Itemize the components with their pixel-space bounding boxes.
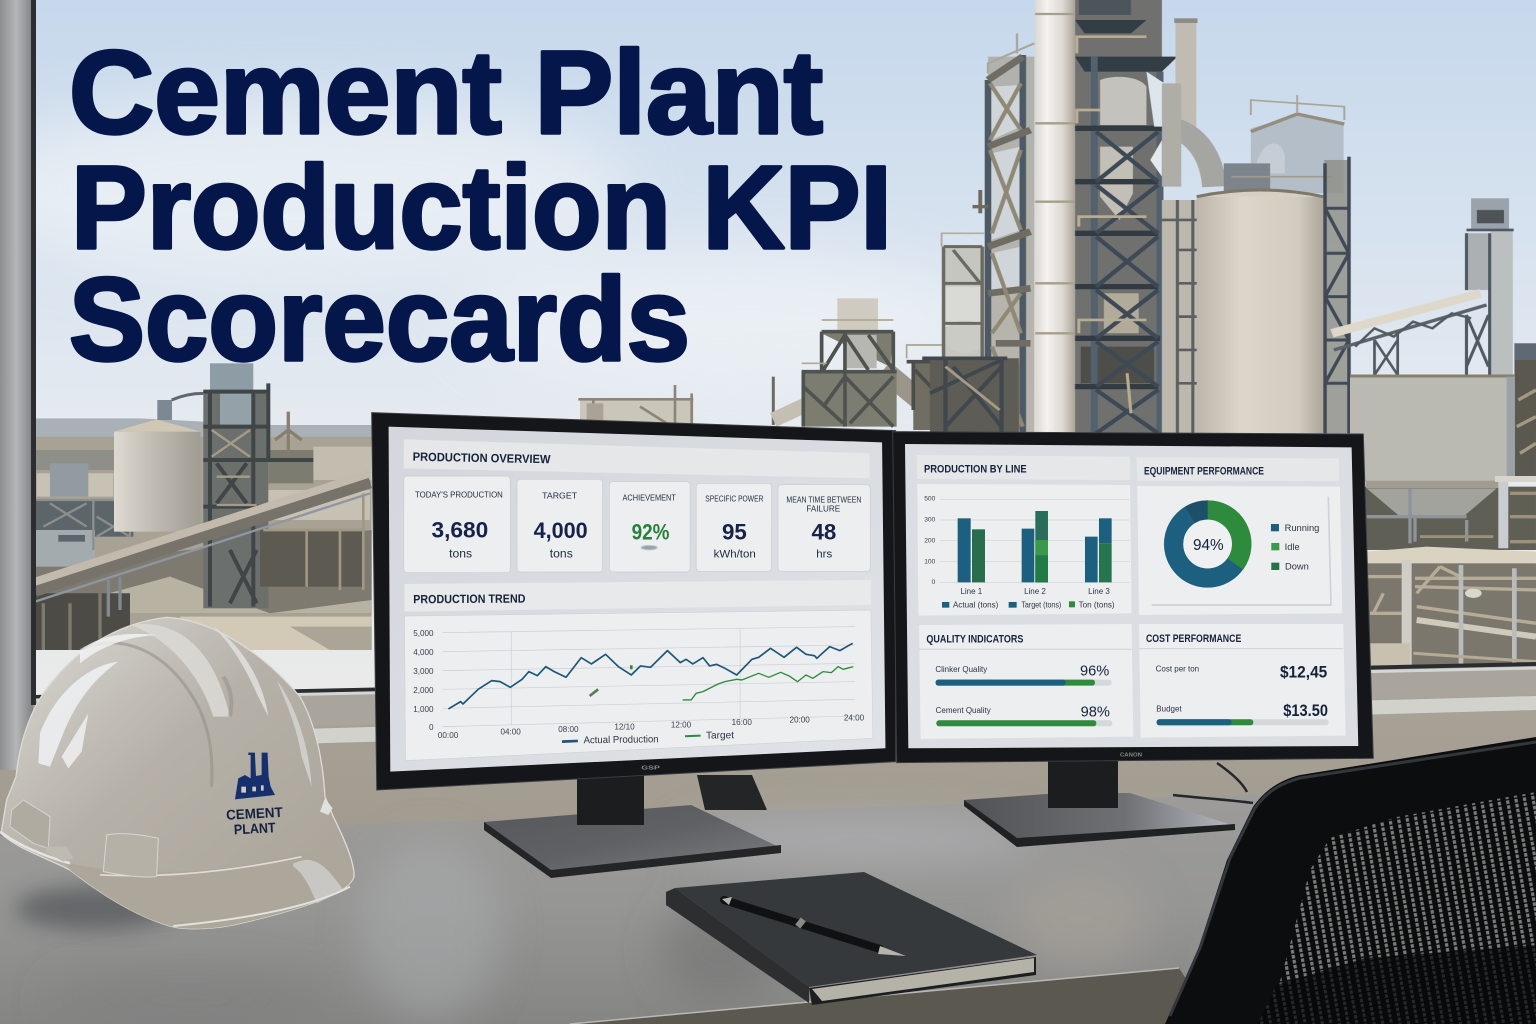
KPI card: achievement — [609, 482, 690, 572]
KPI card: target — [517, 479, 603, 572]
KPI card: mean time between failure: 48 — [812, 519, 836, 544]
clouds — [0, 100, 980, 390]
large silo — [1197, 190, 1323, 433]
far silo — [114, 393, 203, 532]
far conveyor — [35, 473, 370, 617]
factory icon — [235, 753, 275, 799]
bezel — [372, 413, 896, 790]
window sill — [35, 664, 1536, 697]
actual production line — [448, 643, 853, 709]
KPI card: today's production: 3,680 — [432, 517, 488, 542]
legend: Target — [706, 730, 734, 742]
hat shadow — [15, 886, 175, 930]
metric: budget — [1156, 701, 1329, 725]
panel: cost performance: COST PERFORMANCE — [1146, 633, 1241, 645]
left monitor stand — [484, 775, 781, 878]
office chair — [1165, 737, 1536, 1024]
second deck — [907, 345, 1020, 430]
bar chart: production by line: 200 — [924, 538, 936, 545]
category labels: Line 3 — [1088, 587, 1110, 596]
x axis labels: 20:00 — [789, 716, 810, 725]
hopper and frame — [1360, 476, 1536, 550]
KPI card: target: TARGET — [542, 491, 578, 501]
brand mark: CANON — [1120, 753, 1142, 759]
panel: quality indicators — [919, 624, 1133, 739]
window frame left — [0, 0, 33, 770]
metric: budget: Budget — [1156, 705, 1182, 714]
legend: Actual Production — [584, 734, 659, 746]
y axis labels: 0 — [429, 723, 434, 732]
metric: cement quality: 98% — [1081, 705, 1110, 721]
title: Cement Plant — [69, 27, 823, 159]
lower-left base — [922, 358, 1019, 433]
distant plant centre — [578, 298, 1020, 430]
far right tower — [1465, 198, 1514, 380]
x axis labels: 00:00 — [438, 731, 459, 740]
metric: cost per ton: $12,45 — [1280, 662, 1327, 681]
far building — [578, 385, 693, 423]
y axis labels: 1,000 — [413, 705, 434, 714]
KPI card: today's production: tons — [449, 546, 472, 560]
metric: clinker quality: Clinker Quality — [935, 665, 987, 674]
desk — [0, 785, 1536, 1024]
top house — [1224, 95, 1344, 193]
KPI card: achievement: ACHIEVEMENT — [622, 492, 676, 502]
legend: Target (tons) — [1021, 601, 1062, 610]
metric: cost per ton: Cost per ton — [1156, 664, 1199, 673]
category labels: Line 1 — [960, 587, 983, 596]
left tower — [973, 33, 1034, 433]
right monitor — [893, 432, 1373, 763]
header: production overview — [404, 439, 870, 478]
brand mark: GSP — [641, 765, 660, 771]
donut chart: equipment performance: 94% — [1193, 537, 1224, 554]
sky — [0, 0, 1536, 720]
desk front edge — [570, 968, 1215, 1024]
KPI card: today's production — [404, 476, 510, 573]
KPI card: today's production: TODAY'S PRODUCTION — [415, 489, 503, 499]
KPI card: target: 4,000 — [534, 518, 588, 543]
mid duct and mast — [773, 370, 940, 425]
hills and ground — [35, 418, 372, 650]
preheater tower — [1075, 0, 1177, 433]
header: production by line: PRODUCTION BY LINE — [924, 464, 1027, 476]
KPI card: target: tons — [550, 546, 573, 560]
bar chart: production by line: 300 — [924, 517, 936, 524]
x axis labels: 12/10 — [614, 722, 635, 731]
KPI card: mean time between failure: FAILURE — [806, 505, 841, 514]
donut chart: equipment performance — [1137, 486, 1342, 615]
brim — [67, 845, 353, 929]
metric: cement quality: Cement Quality — [936, 706, 991, 715]
line chart: production trend — [404, 610, 873, 761]
metric: clinker quality — [935, 664, 1112, 686]
KPI card: mean time between failure: hrs — [816, 549, 833, 561]
donut — [1174, 510, 1242, 578]
panel: quality indicators: QUALITY INDICATORS — [926, 634, 1023, 646]
panel: cost performance — [1139, 624, 1346, 738]
y axis labels: 2,000 — [413, 686, 434, 695]
bar chart: production by line: 0 — [932, 579, 936, 586]
legend — [942, 601, 1115, 610]
title: Production KPI — [71, 142, 892, 274]
x axis labels: 16:00 — [732, 718, 752, 727]
notebook — [666, 872, 1037, 1005]
target line — [683, 667, 853, 700]
logo: factory and CEMENT PLANT: PLANT — [233, 819, 276, 837]
lower-left structure — [942, 233, 988, 363]
wall below window — [0, 665, 1536, 830]
header: equipment performance — [1137, 457, 1339, 481]
title: Scorecards — [69, 254, 690, 386]
KPI card: mean time between failure: MEAN TIME BETWEEN — [786, 495, 862, 504]
desk sheen — [50, 818, 1150, 1024]
y axis labels: 4,000 — [413, 648, 434, 657]
pen — [722, 897, 906, 956]
category labels — [960, 587, 1110, 596]
right conveyor — [1332, 293, 1487, 375]
logo text: CEMENT — [226, 804, 284, 823]
header: equipment performance: EQUIPMENT PERFORMANCE — [1144, 465, 1264, 477]
bar chart: production by line: 500 — [924, 496, 936, 503]
silo stair tower — [1162, 200, 1197, 433]
legend: Ton (tons) — [1079, 601, 1115, 610]
chair frame — [1165, 737, 1536, 1024]
KPI card: mean time between failure — [778, 485, 870, 571]
bars line 3 — [1085, 537, 1098, 582]
header: production overview: PRODUCTION OVERVIEW — [413, 450, 551, 466]
screen — [389, 427, 885, 772]
KPI card: specific power: SPECIFIC POWER — [705, 493, 763, 503]
x axis labels: 08:00 — [558, 725, 579, 734]
x axis labels — [438, 714, 865, 740]
header: production trend — [404, 580, 871, 612]
low right building — [1350, 360, 1536, 665]
y axis labels: 3,000 — [413, 667, 434, 676]
title — [69, 27, 892, 386]
bezel — [893, 432, 1373, 763]
metric: cement quality — [936, 705, 1112, 726]
category labels: Line 2 — [1024, 587, 1046, 596]
legend: Actual (tons) — [953, 601, 999, 610]
metric: cost per ton — [1156, 662, 1327, 681]
right monitor stand — [964, 755, 1253, 847]
metric: clinker quality: 96% — [1080, 664, 1109, 680]
bars line 2 — [1022, 529, 1034, 582]
distant plant left — [35, 363, 372, 650]
header: production trend: PRODUCTION TREND — [413, 592, 526, 606]
screen — [905, 444, 1358, 748]
KPI card: specific power: 95 — [722, 519, 747, 544]
x axis labels: 12:00 — [671, 720, 692, 729]
right edge structure — [1514, 343, 1536, 433]
metric: budget: $13.50 — [1283, 701, 1328, 720]
logo: factory and CEMENT PLANT — [226, 753, 284, 837]
main plant right — [922, 0, 1536, 433]
legend: Idle — [1285, 542, 1300, 552]
legend — [1271, 523, 1319, 572]
header: production by line — [917, 455, 1130, 480]
KPI card: achievement: 92% — [632, 519, 670, 544]
low silo — [1350, 360, 1536, 482]
chair mesh — [1270, 792, 1536, 1024]
left monitor — [372, 413, 896, 790]
bars line 1 — [958, 518, 971, 582]
far left building — [35, 463, 133, 567]
KPI card: specific power — [696, 483, 772, 571]
legend — [562, 730, 734, 746]
highlights — [38, 662, 118, 767]
bar chart: production by line: 100 — [924, 559, 936, 566]
side clips — [103, 834, 158, 877]
bar chart: production by line — [917, 484, 1132, 616]
KPI card: specific power: kWh/ton — [714, 549, 756, 561]
lower deck and frame — [1367, 547, 1536, 665]
legend: Down — [1285, 562, 1309, 572]
ridges — [130, 624, 230, 717]
legend: Running — [1285, 523, 1319, 533]
x axis labels: 04:00 — [500, 728, 521, 737]
far tower — [203, 363, 363, 608]
right stair tower — [1324, 157, 1350, 433]
y axis labels: 5,000 — [413, 629, 434, 638]
small stack and duct — [1162, 18, 1214, 187]
y axis labels — [413, 629, 434, 732]
tall chimney — [1035, 0, 1075, 433]
shell — [1, 617, 354, 929]
mid tower — [802, 298, 897, 427]
hard hat — [0, 617, 354, 929]
x axis labels: 24:00 — [844, 714, 865, 723]
